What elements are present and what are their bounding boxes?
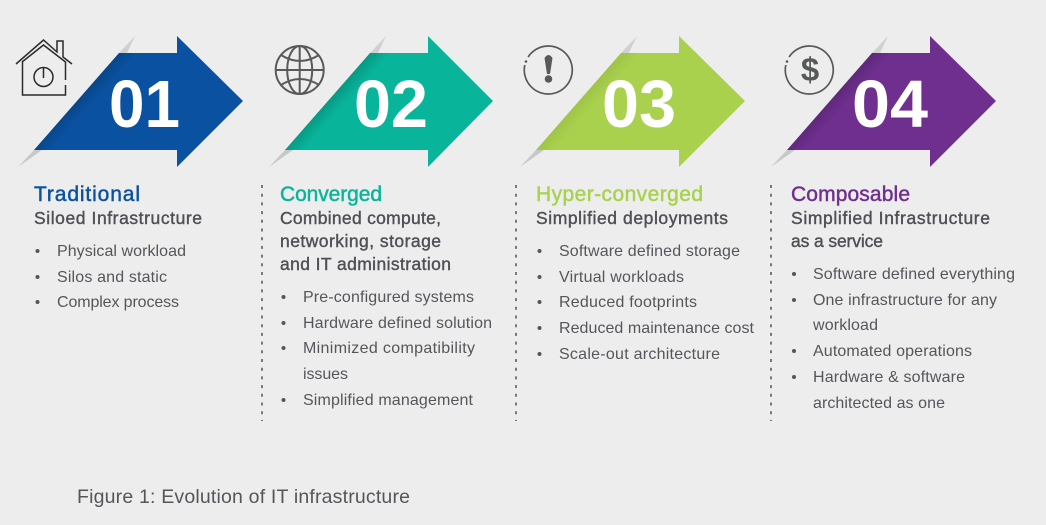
icon: dollar: $ [801,51,819,88]
list: traditional: Silos and static [57,269,167,286]
list: traditional: Complex process [57,294,179,311]
icon: house with power button [16,40,72,95]
list: converged: Simplified management [303,392,474,409]
subheading: Simplified Infrastructure as a service [791,208,990,251]
list: hyper-converged: Virtual workloads [559,269,684,286]
list: converged: Pre-configured systems [303,289,474,306]
list: traditional [36,243,186,311]
list: hyper-converged: Scale-out architecture [559,346,720,363]
heading: Converged: Converged [280,183,382,206]
list: composable: Automated operations [813,343,972,360]
icon: dollar [785,46,833,94]
heading: Hyper-converged: Hyper-converged [536,183,703,206]
list: hyper-converged: Reduced maintenance cost [559,320,755,337]
list: hyper-converged [538,243,755,363]
subheading: Simplified deployments: Simplified deployments [536,208,728,228]
arrow 03 [520,36,745,167]
arrow 01: 01 [109,67,180,142]
list: converged: issues [303,366,348,383]
heading: Traditional: Traditional [34,183,140,206]
arrow 01 [18,36,243,167]
list: composable: One infrastructure for any [813,292,997,309]
list: composable: workload [812,317,878,334]
icon: globe [276,46,324,94]
arrow 04 [771,36,996,167]
list: composable: Software defined everything [813,266,1015,283]
list: composable: architected as one [813,395,945,412]
list: converged [282,289,492,409]
subheading: Combined compute: Combined compute, [280,208,441,228]
subheading: Combined compute: and IT administration [280,254,451,274]
subheading: Simplified Infrastructure as a service: as a service [791,231,883,251]
caption: Figure 1: Evolution of IT infrastructure [77,486,410,508]
list: traditional: Physical workload [57,243,186,260]
arrow 02 [269,36,493,167]
arrow 02: 02 [354,67,428,142]
subheading: Combined compute: networking, storage [280,231,441,251]
heading: Composable: Composable [791,183,910,206]
subheading: Simplified Infrastructure as a service: Simplified Infrastructure [791,208,990,228]
list: hyper-converged: Reduced footprints [559,294,697,311]
list: composable: Hardware & software [813,369,965,386]
list: hyper-converged: Software defined storage [559,243,740,260]
subheading: Combined compute [280,208,451,274]
list: converged: Hardware defined solution [303,315,492,332]
icon: exclamation [524,46,572,94]
arrow 03: 03 [602,67,676,142]
list: composable [792,266,1015,412]
list: converged: Minimized compatibility [303,340,475,357]
arrow 04: 04 [852,67,928,142]
subheading: Siloed Infrastructure: Siloed Infrastructure [34,208,202,228]
